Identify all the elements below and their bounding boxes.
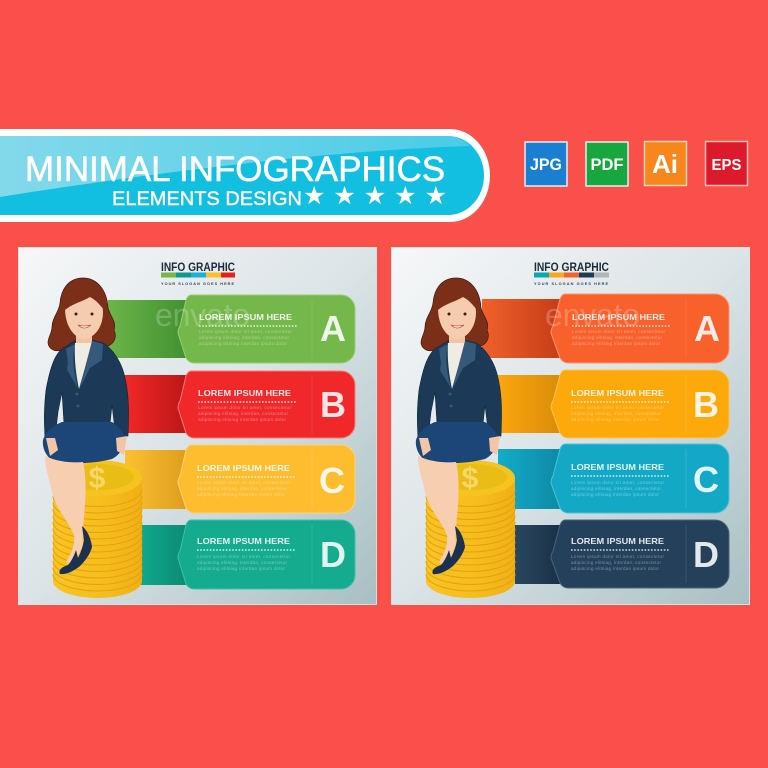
watermark: envato — [545, 297, 640, 333]
card B: adipiscing elitsiag interdan ipsum dolor — [198, 417, 286, 422]
rating stars: ★★★★★ — [303, 181, 447, 210]
panel: left infographic — [18, 247, 377, 605]
card B — [178, 371, 355, 438]
icon: Ai — [644, 142, 686, 186]
card C: adipiscing elitsiag interdan ipsum dolor — [197, 492, 285, 497]
card A: Lorem ipsum dolor sit amet, consectetur — [199, 329, 292, 334]
heading: info graphic: INFO GRAPHIC — [534, 262, 609, 274]
card D: LOREM IPSUM HERE — [197, 536, 290, 546]
back strip C — [498, 449, 564, 509]
card D: D — [693, 534, 719, 575]
back strip B — [497, 375, 564, 433]
card C: LOREM IPSUM HERE — [571, 462, 664, 472]
heading: info graphic — [161, 262, 235, 286]
card C: C — [319, 460, 345, 501]
card B — [551, 370, 729, 438]
card A: LOREM IPSUM HERE — [572, 312, 665, 322]
card B: adipiscing elitsiag, interdan, consectetur — [198, 411, 288, 416]
card C — [551, 444, 729, 513]
card A: adipiscing elitsiag interdan ipsum dolor — [199, 341, 287, 346]
card B: Lorem ipsum dolor sit amet, consectetur — [198, 405, 291, 410]
card B: LOREM IPSUM HERE — [198, 388, 291, 398]
icon: dollar sign: $ — [89, 462, 106, 495]
card B: LOREM IPSUM HERE — [571, 388, 664, 398]
card A: adipiscing elitsiag, interdan, consectetur — [572, 335, 662, 340]
card C: adipiscing elitsiag interdan ipsum dolor — [571, 492, 659, 497]
card B: adipiscing elitsiag, interdan, consectetur — [571, 411, 661, 416]
card B: adipiscing elitsiag interdan ipsum dolor — [571, 417, 659, 422]
card A — [178, 295, 355, 363]
card D: Lorem ipsum dolor sit amet, consectetur — [197, 554, 290, 559]
back strip D — [140, 525, 190, 585]
icon: JPG — [525, 142, 567, 186]
card D: LOREM IPSUM HERE — [571, 536, 664, 546]
card D — [551, 520, 729, 588]
card A: A — [694, 308, 720, 349]
heading: info graphic: YOUR SLOGAN GOES HERE — [534, 282, 608, 286]
back strip A — [482, 299, 564, 358]
card A: LOREM IPSUM HERE — [199, 312, 292, 322]
card D: adipiscing elitsiag, interdan, consectetur — [197, 560, 287, 565]
icon: JPG: JPG — [530, 155, 562, 174]
card C: LOREM IPSUM HERE — [197, 463, 290, 473]
card D: D — [320, 534, 346, 575]
card D — [178, 520, 355, 589]
card C: Lorem ipsum dolor sit amet, consectetur — [571, 480, 664, 485]
card B: Lorem ipsum dolor sit amet, consectetur — [571, 405, 664, 410]
icon: PDF — [586, 142, 628, 186]
card A: adipiscing elitsiag interdan ipsum dolor — [572, 341, 660, 346]
banner — [0, 129, 490, 222]
card C: adipiscing elitsiag, interdan, consectetur — [197, 486, 287, 491]
icon: EPS — [706, 142, 748, 186]
card A: A — [320, 308, 346, 349]
back strip C — [125, 450, 190, 509]
woman on coin stack — [43, 278, 142, 598]
card C: adipiscing elitsiag, interdan, consectetur — [571, 486, 661, 491]
watermark: envato — [155, 297, 250, 333]
heading: info graphic — [534, 262, 609, 286]
heading: info graphic: INFO GRAPHIC — [161, 262, 235, 274]
banner title: MINIMAL INFOGRAPHICS — [25, 150, 445, 189]
back strip D — [515, 525, 564, 584]
card A: Lorem ipsum dolor sit amet, consectetur — [572, 329, 665, 334]
icon: dollar sign: $ — [462, 462, 479, 495]
card A: adipiscing elitsiag, interdan, consectetur — [199, 335, 289, 340]
card D: Lorem ipsum dolor sit amet, consectetur — [571, 554, 664, 559]
heading: info graphic: YOUR SLOGAN GOES HERE — [161, 282, 234, 286]
card D: adipiscing elitsiag, interdan, consectetur — [571, 560, 661, 565]
back strip B — [120, 375, 190, 433]
panel: right infographic — [391, 247, 750, 605]
banner subtitle: ELEMENTS DESIGN — [112, 189, 302, 210]
woman on coin stack — [416, 278, 515, 598]
icon: PDF: PDF — [590, 155, 624, 174]
card C: Lorem ipsum dolor sit amet, consectetur — [197, 480, 290, 485]
card D: adipiscing elitsiag interdan ipsum dolor — [197, 566, 285, 571]
card C — [178, 445, 355, 513]
card A — [551, 294, 729, 363]
card C: C — [693, 459, 719, 500]
card D: adipiscing elitsiag interdan ipsum dolor — [571, 566, 659, 571]
card B: B — [693, 384, 719, 425]
icon: EPS: EPS — [712, 157, 742, 174]
card B: B — [320, 384, 346, 425]
icon: Ai: Ai — [652, 149, 678, 179]
back strip A — [108, 300, 190, 358]
